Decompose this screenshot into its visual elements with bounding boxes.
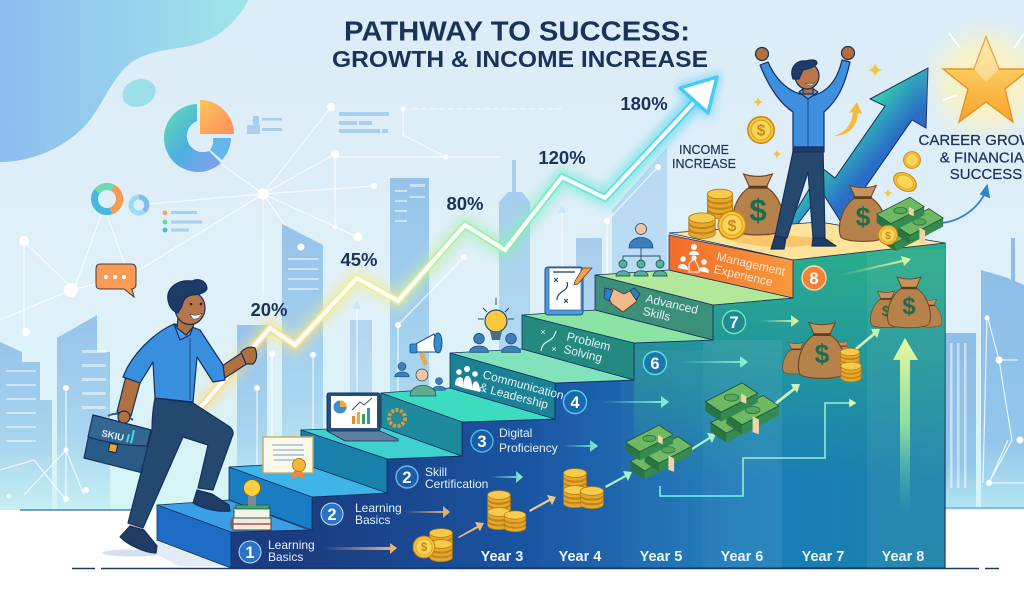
step labels flat: Certification <box>425 477 488 491</box>
step labels flat: Learning <box>355 501 402 515</box>
staircase main block <box>231 243 945 568</box>
label: communication and leadership: Communication <box>481 367 565 402</box>
neck <box>177 318 195 335</box>
year labels: Year 4 <box>559 549 601 565</box>
money: coins year 2: $ <box>421 541 428 554</box>
shirt <box>123 324 225 402</box>
step labels flat: Digital <box>499 426 532 440</box>
year labels: Year 7 <box>802 549 844 565</box>
left arm skin <box>117 372 140 416</box>
money: bags year 7 <box>783 322 861 382</box>
platform money left: $ <box>749 193 767 228</box>
fists <box>756 48 768 60</box>
title: GROWTH & INCOME INCREASE <box>332 46 708 72</box>
step number badges: 7 <box>729 314 739 332</box>
curved arrow to career label <box>940 186 989 223</box>
year labels: Year 5 <box>640 549 682 565</box>
year labels: Year 3 <box>481 549 523 565</box>
shoes <box>771 236 786 249</box>
sparkles <box>753 63 893 198</box>
floor lines <box>20 508 1024 510</box>
money: bags year 8: $ <box>882 304 890 320</box>
step 7 surfaces <box>595 270 793 340</box>
icon: megaphone and team <box>395 333 445 396</box>
icon: gear <box>389 410 405 426</box>
back shoe <box>120 526 157 553</box>
step 6 surfaces <box>522 310 713 380</box>
thumbs up mini legend <box>247 116 282 134</box>
background network lines <box>0 107 1024 500</box>
label: problem solving: Problem <box>565 329 612 354</box>
step 3 surfaces <box>301 427 462 493</box>
small orange arrow <box>834 102 862 136</box>
percentage labels: 180% <box>620 93 668 114</box>
label: advanced skills <box>641 291 699 330</box>
step labels flat: Basics <box>268 550 303 564</box>
trousers <box>128 398 233 528</box>
step number badges <box>239 266 826 563</box>
percentage labels: 120% <box>538 147 586 168</box>
money: bags year 8 <box>871 277 942 328</box>
year labels: Year 8 <box>882 549 924 565</box>
label: management experience: Experience <box>712 262 774 289</box>
icon: management team <box>678 244 709 273</box>
money: bags year 7: $ <box>815 339 830 369</box>
smile <box>805 82 815 86</box>
man climbing stairs <box>84 280 257 553</box>
step 2 surfaces <box>229 463 387 530</box>
icon: lightbulb and people <box>470 298 520 352</box>
year labels: Year 6 <box>721 549 763 565</box>
step 1 surfaces <box>157 500 309 568</box>
step number badges: 3 <box>477 433 487 451</box>
mini legend <box>163 211 202 232</box>
label: advanced skills: Advanced <box>644 291 699 317</box>
step labels flat: Basics <box>355 513 390 527</box>
platform money right: $ <box>885 231 891 242</box>
shirt and arms <box>760 60 850 147</box>
income increase label <box>672 143 736 171</box>
step 4 surfaces <box>381 388 555 456</box>
fist <box>241 347 257 364</box>
income increase label: INCOME <box>679 143 729 157</box>
speech bubble icon <box>96 264 136 297</box>
bottom baseline <box>72 568 999 570</box>
icon: problem solving arrows: × <box>540 327 546 337</box>
hair <box>792 60 817 79</box>
label: communication and leadership: & Leadership <box>478 380 550 412</box>
platform money left: $ <box>728 217 737 235</box>
platform money left <box>689 174 784 239</box>
money: coins year 2 <box>413 529 452 562</box>
icon: problem solving arrows <box>540 327 557 354</box>
text bars <box>339 112 389 133</box>
percentage labels: 80% <box>446 193 484 214</box>
large up arrow <box>893 338 918 516</box>
title: PATHWAY TO SUCCESS: <box>344 16 690 46</box>
icon: clipboard: × <box>553 275 559 285</box>
smile <box>190 313 202 319</box>
belt <box>793 147 824 152</box>
platform money right <box>839 186 943 251</box>
step labels rotated <box>478 249 787 415</box>
platform money right: $ <box>856 202 871 232</box>
step number badges: 4 <box>570 394 580 412</box>
neck <box>803 84 813 94</box>
head <box>795 63 819 89</box>
label: problem solving <box>562 329 612 366</box>
step labels flat: Learning <box>268 538 315 552</box>
step labels flat <box>268 426 558 564</box>
floating coins: $ <box>757 123 766 140</box>
money: bags year 8: $ <box>902 293 916 320</box>
step 5 surfaces <box>450 349 634 419</box>
big green-blue arrow behind winner <box>783 68 928 234</box>
network nodes <box>7 103 1024 502</box>
money: cash year 6 <box>705 383 779 443</box>
icon: problem solving arrows: × <box>551 344 557 354</box>
building window marks <box>6 184 966 488</box>
step number badges: 2 <box>402 469 412 487</box>
small up arrows in background <box>353 205 566 309</box>
pie chart <box>164 100 234 172</box>
icon: clipboard <box>545 267 592 315</box>
trousers <box>775 147 825 238</box>
title <box>332 16 708 72</box>
money: cash year 5 <box>626 425 692 479</box>
shadow under man <box>102 535 231 566</box>
label: advanced skills: Skills <box>641 304 672 324</box>
step labels flat: Proficiency <box>499 441 558 455</box>
percentage labels: 20% <box>250 299 288 320</box>
small donut chart <box>94 186 147 213</box>
step 8 surfaces <box>669 222 945 298</box>
step number badges: 1 <box>245 544 255 562</box>
hair <box>168 280 207 313</box>
right arm skin <box>222 352 248 378</box>
background city skyline <box>0 147 1024 510</box>
icon: clipboard: × <box>563 296 569 306</box>
percentage labels: 45% <box>340 249 378 270</box>
step line arrow <box>660 400 855 496</box>
label: management experience <box>712 249 787 291</box>
icon: laptop chart <box>327 393 398 441</box>
star <box>938 33 1024 130</box>
head <box>175 292 205 324</box>
year labels <box>481 549 924 565</box>
money: coins year 3 <box>488 491 526 532</box>
front shoe <box>193 490 230 511</box>
growth line <box>200 77 717 408</box>
career growth label <box>918 132 1024 183</box>
percentage labels <box>250 93 668 320</box>
icon: team on communication step <box>455 366 480 392</box>
horizontal progress arrows <box>323 256 911 554</box>
step number badges: 8 <box>809 270 819 288</box>
year column tints <box>540 250 945 568</box>
step number badges: 2 <box>327 506 337 524</box>
icon: certificate <box>263 437 313 480</box>
winner man <box>756 46 854 249</box>
icon: org chart <box>616 224 667 276</box>
decorative blob <box>0 0 248 162</box>
step labels flat: Skill <box>425 465 447 479</box>
eyes <box>190 303 202 305</box>
label: management experience: Management <box>715 249 787 279</box>
diagonal money arrows <box>458 329 880 538</box>
income increase label: INCREASE <box>672 157 736 171</box>
icon: handshake <box>604 288 640 312</box>
label: problem solving: Solving <box>562 342 604 365</box>
career growth label: SUCCESS <box>950 166 1022 183</box>
icon: books and bulb <box>231 480 271 530</box>
floating coins <box>748 117 920 195</box>
money: coins year 4 <box>564 469 603 509</box>
briefcase: SKIU <box>100 428 125 444</box>
briefcase <box>84 414 151 473</box>
step number badges: 6 <box>650 355 660 373</box>
